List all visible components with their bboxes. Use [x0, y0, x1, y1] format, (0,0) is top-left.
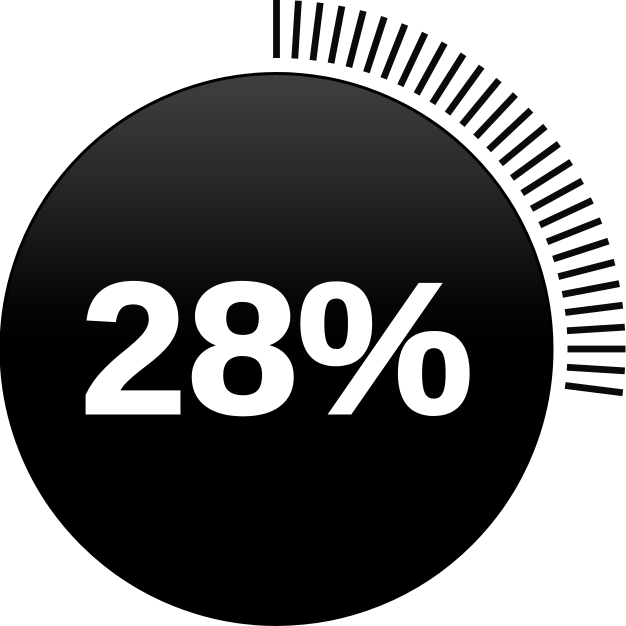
percentage value [80, 244, 473, 454]
tick marks: 28 percent arc [276, 0, 626, 393]
main circle [1, 74, 552, 624]
percentage value: 8 [187, 245, 298, 454]
percentage value: 2 [80, 245, 187, 454]
percentage value: % [297, 244, 473, 453]
